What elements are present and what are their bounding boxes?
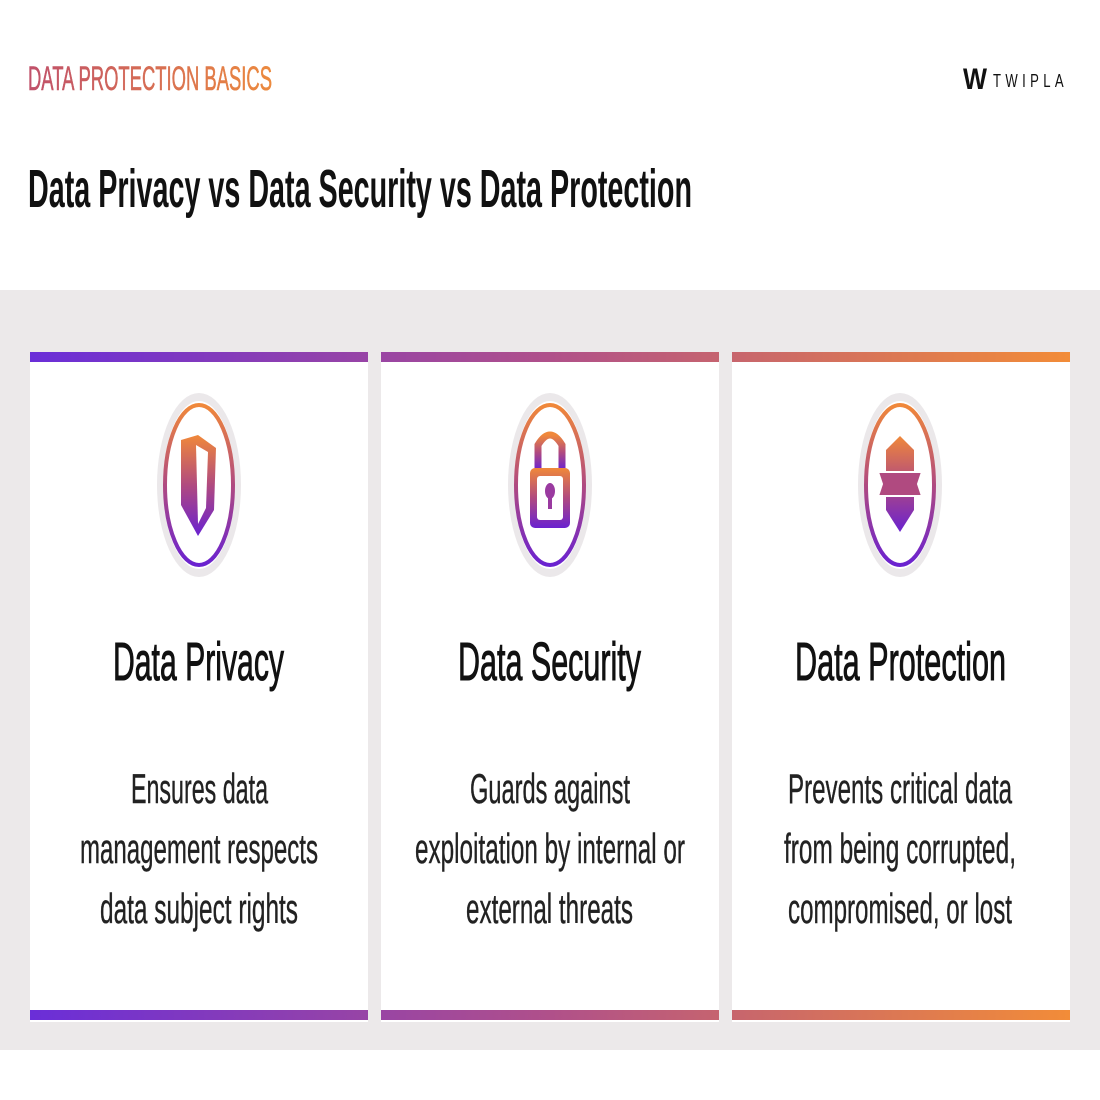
icon: badge shield bbox=[858, 393, 942, 577]
text block: data subject rights bbox=[100, 885, 298, 932]
header label: DATA PROTECTION BASICS bbox=[28, 60, 272, 98]
logo: W bbox=[963, 63, 988, 96]
panel: data security bbox=[381, 352, 719, 1022]
panel: data protection bbox=[732, 352, 1070, 1022]
text block bbox=[784, 765, 1016, 932]
text block: external threats bbox=[466, 885, 633, 932]
icon: lock bbox=[508, 393, 592, 577]
text block: exploitation by internal or bbox=[415, 825, 685, 872]
logo bbox=[963, 63, 1068, 96]
background band bbox=[0, 290, 1100, 1050]
panel: data privacy bbox=[30, 352, 368, 1022]
text block: Guards against bbox=[470, 765, 630, 812]
text block: Ensures data bbox=[131, 765, 268, 812]
heading: Data Privacy bbox=[113, 632, 284, 692]
icon: shield bbox=[157, 393, 241, 577]
text block bbox=[80, 765, 318, 932]
text block bbox=[415, 765, 685, 932]
heading: Data Security bbox=[458, 632, 641, 692]
text block: management respects bbox=[80, 825, 318, 872]
logo: TWIPLA bbox=[993, 71, 1068, 91]
